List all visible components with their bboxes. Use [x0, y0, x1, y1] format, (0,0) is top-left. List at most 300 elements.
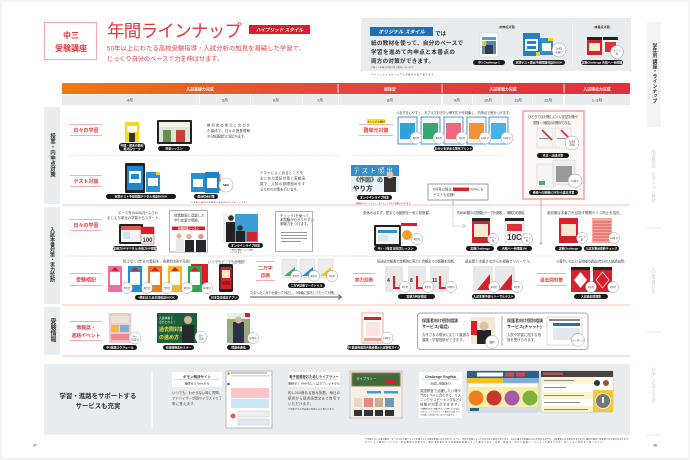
pill	[209, 295, 239, 300]
callout	[276, 212, 315, 252]
service card: challenge english: ※受講には別途お申し込みが必要です。	[420, 412, 456, 416]
months: 9月	[454, 98, 460, 103]
label: past exams	[537, 274, 566, 286]
label: magazines and events	[70, 322, 102, 340]
text	[107, 210, 162, 220]
books: five units	[398, 117, 513, 144]
note: ※講座はスマートフォン・タブレットでもご受講いただけます。	[355, 201, 412, 205]
magazine	[109, 313, 141, 344]
seminar image: 点がとれる！	[159, 320, 176, 324]
pill: 中1都道府県別合格者数&入試情報ガイド	[347, 345, 400, 350]
section: classes and naishin	[44, 107, 584, 206]
note	[230, 248, 253, 254]
text: 夏休みはまず、夏までの範囲を一気に総復習。	[363, 210, 432, 215]
page number right: 48	[653, 444, 657, 448]
service card: challenge english	[419, 372, 462, 418]
pill: オンラインライブ授業	[360, 195, 389, 200]
tag: オリジナル教材	[367, 119, 385, 123]
magazine: 毎月号	[249, 336, 257, 340]
books: theme: 10C	[507, 233, 522, 242]
service card: challenge english: Challenge English	[425, 375, 456, 379]
screenshot: english top	[467, 371, 539, 412]
text: 約10,000題の入試頻出テーマを攻略し、実戦力を養成。	[457, 210, 527, 215]
books: tests: 4	[387, 278, 390, 284]
books: honban: テーマ	[613, 48, 621, 52]
books: theme: テーマ	[523, 236, 531, 240]
book: guide	[362, 313, 393, 344]
arrow: down	[540, 206, 542, 244]
pill: ねらいを定める強化プリント	[435, 146, 472, 151]
tablet with book	[125, 163, 160, 193]
pill: 作文・記述対策	[543, 153, 563, 158]
panel: parent consultation	[418, 313, 588, 350]
months: 8月	[387, 98, 393, 103]
books: five units: 10月号	[503, 136, 511, 140]
banner: test video: やり方	[353, 184, 373, 192]
service card: challenge english: ※タブレットおよびネット環境が必要です。	[420, 410, 461, 414]
tab: how to apply: お申し込みの方法	[651, 367, 656, 404]
side label: 授業・内申点対策	[49, 132, 56, 178]
text: たまったニガテを使って対応し、9月軸に強化してもって対策。	[250, 290, 337, 295]
pill	[466, 246, 494, 251]
service title: e-library	[288, 372, 340, 387]
service text: アドバイザーが図やイラストで丁	[172, 396, 223, 400]
section: exam information	[44, 307, 588, 355]
service text: 読書から読書感想文まで自宅で	[288, 396, 341, 400]
label: difficult units: 難単元対策	[363, 127, 389, 134]
heading: サービスも充実	[76, 401, 121, 410]
header	[44, 21, 310, 63]
text: るための対策を行います。	[260, 186, 300, 192]
pill: 実戦Challenge 合格へ一歩問題	[582, 60, 622, 65]
book: challenge text	[480, 33, 498, 57]
note: ※教材は講座ごとにご受講	[230, 248, 253, 252]
photo: advisor: 随時	[489, 340, 495, 344]
books: five units: 5月号	[413, 136, 420, 140]
description: 50年以上にわたる高校受験指導・入試分析の知見を凝縮した学習で、	[107, 44, 305, 52]
connectors	[453, 199, 541, 206]
footnote: ※定期テスト対策の教材・サービスは中間テストや定期テスト対策の範囲に合わせます。ただし、学校の進度によっては合わない場合があります。入試に関する情報は2026年度のものです。今後変更になる場合があります。教材内容は一部変更となる場合があります。	[365, 437, 630, 441]
divider	[152, 371, 153, 428]
books: memorization: 5月号	[124, 286, 131, 290]
pill: 入試過去問題集	[581, 294, 601, 299]
books: memorization: 9月号	[184, 286, 191, 290]
pill	[288, 283, 325, 288]
books: mock: 1月号	[491, 285, 498, 289]
callout: 実戦力をつけます。	[280, 221, 310, 226]
text	[260, 170, 306, 192]
pill: 合格勉強法セミナー	[165, 345, 192, 350]
label: diagnosis: 診断	[261, 272, 270, 279]
pill	[194, 194, 218, 199]
phone app	[219, 264, 233, 292]
pill: 実戦Challenge	[559, 246, 579, 251]
course badge: 受験講座	[55, 43, 87, 53]
text: いつでもどこでも全暗記!	[208, 259, 245, 264]
label: memorization	[70, 274, 102, 286]
phone consultation: 保護者向け個別相談	[422, 317, 458, 323]
text: ひとりでは対策しにくい記述対策や	[528, 114, 579, 119]
pill: 二万字診断マークドリル	[291, 283, 323, 288]
pill	[497, 246, 532, 251]
arrow: continue	[250, 294, 342, 300]
text: まとめた暗記対策と実戦演	[260, 176, 306, 180]
service card: challenge english: ニングやスピーキングなど4	[420, 397, 461, 402]
label: test	[70, 176, 102, 186]
months: 11月	[514, 98, 522, 103]
image: online live	[223, 214, 258, 242]
magazine	[227, 313, 258, 344]
pill: 中1・2復習 総復習レッスン	[378, 246, 414, 251]
books: tests: 8月号	[425, 285, 432, 289]
months: 12月	[544, 98, 552, 103]
banner: test video: テスト傾出	[353, 166, 393, 175]
seminar image: 過去問対策	[159, 326, 184, 333]
course badge: 中三	[63, 30, 79, 40]
text: 過去問と本番さながらの模擬でリハーサル。	[465, 258, 533, 264]
banner: test video: 《作図》の	[353, 176, 383, 184]
screen: chat: メッセージ	[572, 338, 585, 342]
side label: 受験情報	[49, 317, 56, 343]
books: tests	[385, 266, 456, 292]
footnote: original style: ※オリジナルスタイルでは全教材が紙で届きます。	[371, 72, 436, 76]
tab: active	[647, 22, 661, 127]
side label	[44, 307, 60, 355]
pill: 実戦力判定模試	[406, 294, 427, 299]
service text: 寧に答えます。	[172, 401, 197, 406]
speech box with teachers: 映像授業レッスン	[178, 226, 199, 230]
label: daily study: 日々の学習	[73, 222, 99, 229]
pill: 書対応ワーク	[123, 146, 141, 151]
service title: question site: 進研ゼミ Webから	[185, 380, 209, 386]
timeline bar	[62, 83, 630, 105]
speech box with teachers	[170, 210, 208, 252]
footnote: オプション教材については、別途費用が必要です。教材のお届け月は受講開始時期によって異なります。内容・数量は、学年や受講コースによって異なります。詳しくはご案内をご覧ください。	[365, 440, 605, 444]
description	[107, 44, 305, 63]
phases	[62, 83, 630, 94]
text: テストによく出るところを	[260, 170, 303, 175]
side label	[44, 107, 60, 204]
books: honban: 別	[616, 52, 619, 56]
label: diagnosis	[256, 262, 275, 280]
pill	[227, 345, 250, 350]
text	[207, 122, 251, 138]
phases: 入試実戦力完成	[489, 86, 517, 91]
service title: e-library: 進研ゼミ Webもしくはタブレットから	[288, 380, 340, 386]
phone consultation: お子さまの現状に応じて最適な	[422, 332, 470, 337]
books: five units: 7月号	[459, 136, 466, 140]
books: diagnosis: 6月号	[311, 274, 318, 278]
original style text: では	[435, 30, 447, 38]
label: diagnosis: 二万字	[258, 264, 273, 272]
tab: active: 学年別 講座・ラインナップ	[652, 42, 657, 105]
pill	[555, 246, 582, 251]
naishin label: [内申点対策]	[499, 24, 515, 29]
books: five units: 6月号	[436, 136, 443, 140]
pill: 授業レッスン	[165, 146, 183, 151]
original style text: ※新しい知識の内容は別の教材に沿います。	[371, 65, 415, 69]
side label	[44, 207, 60, 304]
divider	[501, 316, 503, 346]
section: exam and ability	[44, 206, 627, 304]
tag	[367, 119, 385, 124]
section rules	[62, 205, 630, 356]
months: 5月	[222, 98, 228, 103]
pill: 保護者通信	[231, 345, 246, 350]
seminar image: 10～	[198, 335, 204, 338]
text: 直前期は本番力を目指す問題やミス防止を強化。	[547, 210, 623, 215]
service text: 約1,000冊ある読み放題。毎日の	[288, 390, 341, 395]
books: theme	[472, 218, 532, 244]
pill	[228, 243, 263, 248]
seminar image	[157, 313, 207, 343]
tablet and book: 100	[142, 238, 153, 244]
pill	[574, 294, 608, 299]
chat consultation: 保護者向け個別相談	[507, 317, 543, 323]
label: daily study	[70, 220, 102, 230]
callout: チェック1を使って、	[280, 213, 312, 218]
screenshot: questions	[226, 371, 272, 428]
books: tests: 11	[432, 278, 438, 284]
books: diagnosis: 5月号	[293, 274, 300, 278]
label: daily study: 日々の学習	[73, 127, 99, 134]
pill: 実戦力UPデジタル/合格力UP問題	[113, 246, 157, 251]
panel: support services	[44, 364, 630, 435]
tablet and book: review: 8月号	[414, 237, 421, 241]
service text	[288, 390, 341, 411]
pill	[513, 60, 565, 65]
books: theme: 別	[492, 238, 495, 242]
pill: 合格へ一歩問題100	[502, 246, 527, 251]
chat consultation	[507, 317, 543, 342]
seminar image: の進め方	[159, 334, 179, 341]
tablet and book: review	[374, 223, 422, 246]
book: guide: 12月号	[383, 336, 391, 340]
books: diagnosis: 7月号	[329, 274, 336, 278]
text: つまずきしやすく、おさえておきたい教材だけを特集し、内申点で差をつけます。	[396, 110, 512, 115]
original style text: 紙の教材を使って、自分のペースで	[371, 39, 463, 47]
pill: 入試本番予想リハーサルテスト	[473, 294, 514, 299]
label: past exams: 過去問対策	[540, 276, 563, 284]
title: 年間ラインナップ	[107, 21, 242, 41]
pill: 中間・期末の教科	[120, 142, 144, 148]
note: ※本紙の直前予想問題と暗記BOOKがセットです。	[191, 200, 248, 204]
service card: challenge english: 技能の対策ができます。	[420, 402, 461, 406]
books: test blue: お届け	[555, 50, 563, 54]
books: tests: 4月号	[402, 285, 409, 289]
books: tests: 8	[410, 278, 413, 284]
pill	[119, 142, 145, 151]
books: theme: 別	[526, 238, 529, 242]
text: や入試基礎力に役立ちます。	[207, 134, 247, 138]
pill	[398, 294, 435, 299]
service card: challenge english: 英語教室で活躍したい場や	[420, 388, 462, 393]
callout: 本試験が分かりやすい	[280, 217, 315, 222]
service title: question site	[172, 372, 222, 387]
seminar image: 12月	[198, 336, 204, 340]
pill: 入試本番前最終チェック	[586, 246, 618, 251]
hybrid style tag: ハイブリッド スタイル	[256, 28, 303, 33]
hybrid style tag	[249, 25, 310, 34]
side label: 入試本番対策・実力診断	[49, 227, 55, 283]
service text: いつでも、わからない時に質問。	[172, 390, 222, 395]
speech box with teachers: 学力定着の問題。	[174, 218, 201, 222]
screenshot: english drill	[541, 371, 613, 412]
books: memorization: 6月号	[144, 286, 151, 290]
books: mock: 2月号	[514, 285, 521, 289]
pill	[158, 146, 190, 151]
label: daily study	[70, 124, 102, 136]
callout: の中にも	[470, 186, 484, 192]
label: memorization: 受験暗記	[76, 276, 96, 284]
text: エース号(5/6/8)月+ふさわ	[118, 210, 159, 215]
screenshot: library	[350, 371, 402, 418]
text: 覚えなく3年分の暗記を、各教科5冊で完成!	[123, 258, 190, 264]
months: 6月	[273, 98, 279, 103]
chat consultation: 入試や学習に関する相	[507, 332, 542, 337]
service title: e-library: 電子図書館おためしライブラリー	[289, 374, 339, 379]
text: まじえた単元の学習からスタート。	[107, 215, 162, 220]
text: ※着手いただける地域の過去3年分の入試過去問。	[556, 258, 627, 264]
pill	[163, 345, 194, 350]
books: test prep	[191, 172, 233, 193]
phases: 総復習	[384, 86, 396, 91]
magazine: 4～	[133, 336, 137, 339]
months: 7月	[317, 98, 323, 103]
text: た構成で、日々の授業理解	[207, 128, 251, 133]
label: ability test: 実力診断	[355, 276, 374, 284]
pill: 中3 Challenge 1	[478, 60, 500, 65]
tab: related: 関連商品・オプション教材	[651, 150, 656, 203]
books: test prep: NEW	[223, 184, 230, 187]
books: final: 別	[581, 237, 584, 241]
books: past exams: 2月号	[610, 285, 617, 289]
pill	[584, 246, 619, 251]
phases: 入試得点力完成	[583, 86, 611, 91]
phone consultation	[422, 317, 470, 342]
label: test: テスト対策	[73, 178, 99, 185]
service title: question site: ギモン解決サイト	[183, 374, 211, 379]
books: memorization: 10月号	[203, 286, 211, 290]
pill: 直前得点対策	[197, 194, 215, 199]
footnote	[365, 437, 630, 444]
books: interview: 12月号	[571, 179, 579, 183]
pill	[374, 246, 417, 251]
banner: test video	[351, 165, 399, 192]
books: memorization	[108, 264, 212, 294]
original style badge	[370, 27, 433, 36]
original style badge: オリジナル スタイル	[378, 29, 426, 36]
books: past exams: 1月号	[588, 285, 595, 289]
callout: テストも収録!!	[433, 192, 455, 197]
original style text: 学習を進めて内申点と本番点の	[371, 48, 455, 56]
tab: entrance: 入試本番対策	[651, 267, 656, 295]
service card: challenge english: お試し受講あり	[430, 380, 451, 386]
description: じっくり自分のペースで力を伸ばせます。	[107, 55, 223, 63]
pill: 5教科まとめ全部暗記BOOK	[138, 295, 176, 300]
pill	[106, 194, 176, 199]
heading	[60, 391, 136, 410]
tablet: lessons	[157, 120, 192, 144]
pill	[472, 294, 515, 299]
books: essay	[537, 128, 579, 150]
page number left: 47	[33, 444, 37, 448]
seminar image: 入試本番で	[159, 316, 173, 320]
divider	[571, 23, 574, 66]
books: essay: 添削	[569, 142, 575, 146]
pill: 定期テスト予想問題デジタル/暗記BOOK	[115, 194, 168, 199]
pill: オンラインライブ授業	[231, 243, 260, 248]
pill: 定期テスト直前予想問題/暗記BOOK	[515, 60, 563, 65]
speech box with teachers: 授業動画と連動した	[174, 212, 205, 218]
course badge	[44, 22, 96, 60]
books: tests: 11月号	[447, 285, 455, 289]
callout: 9月号以降は	[433, 186, 452, 192]
magazine: 10月号	[131, 337, 139, 341]
books: test blue: 年4回	[556, 47, 563, 51]
service card: challenge english: ※保護者の方のご同意のもと、ご利用いただけます。	[420, 406, 461, 410]
text: 記述式の解答で定期的に実力と合格までの距離を診断。	[377, 258, 457, 264]
service text: いただけます。	[288, 401, 313, 406]
pill	[135, 295, 178, 300]
service text: ※閲覧できる作品数は時期により異なります。	[288, 407, 336, 411]
books: memorization: 7月号	[164, 286, 171, 290]
original style text	[371, 30, 463, 69]
text: 英検・小論文の対策ができる。	[533, 120, 573, 125]
photo: advisor	[471, 317, 498, 348]
books: theme: テーマ	[489, 236, 497, 240]
screenshot: library: ライブラリー	[356, 376, 377, 381]
text: 教科書の単元に合わせ	[207, 122, 251, 128]
phases: 入試基礎力完成	[186, 86, 214, 91]
label: ability test	[353, 274, 375, 286]
heading: 学習・進路をサポートする	[60, 391, 136, 400]
books: mock	[473, 266, 522, 292]
chat consultation: 談を受けられます。	[507, 337, 537, 342]
books: past exams	[571, 267, 618, 292]
pill: 実戦Challenge	[470, 246, 490, 251]
books: test blue	[523, 33, 566, 57]
books: five units: 10月号	[481, 136, 489, 140]
pill	[103, 345, 137, 350]
phone consultation: 進路・学習相談ができます。	[422, 337, 466, 342]
note: いただけます。	[230, 250, 243, 254]
original style text: 両方の対策ができます。	[371, 57, 434, 65]
pill: 英検への挑戦(CD付)/小論文対策	[533, 190, 574, 195]
arrow: dashed	[453, 207, 466, 228]
months: 10月	[484, 98, 492, 103]
months: 4月	[127, 98, 133, 103]
books: final: テーマ	[578, 235, 586, 239]
phone consultation: サービス(電話)	[422, 323, 449, 329]
side tabs	[646, 22, 661, 435]
service text	[172, 390, 223, 406]
book: yellow	[125, 122, 139, 142]
text	[528, 114, 579, 125]
screen: chat	[547, 317, 585, 346]
books: diagnosis	[282, 259, 338, 282]
honban label: [本番点対策]	[594, 24, 610, 29]
pill	[473, 60, 505, 65]
books: essay: 年3回	[569, 140, 576, 144]
pill: 中3進路スケジュール	[106, 345, 134, 350]
chat consultation: サービス(チャット)	[507, 323, 542, 329]
service card: challenge english: 今のレベルに合わせて、リス	[420, 392, 462, 398]
panel: recommended	[523, 111, 584, 199]
pill: 日本語全暗記アプリ	[211, 295, 237, 300]
text: 習で、入試の基礎固めをす	[260, 181, 306, 186]
callout	[428, 184, 488, 200]
